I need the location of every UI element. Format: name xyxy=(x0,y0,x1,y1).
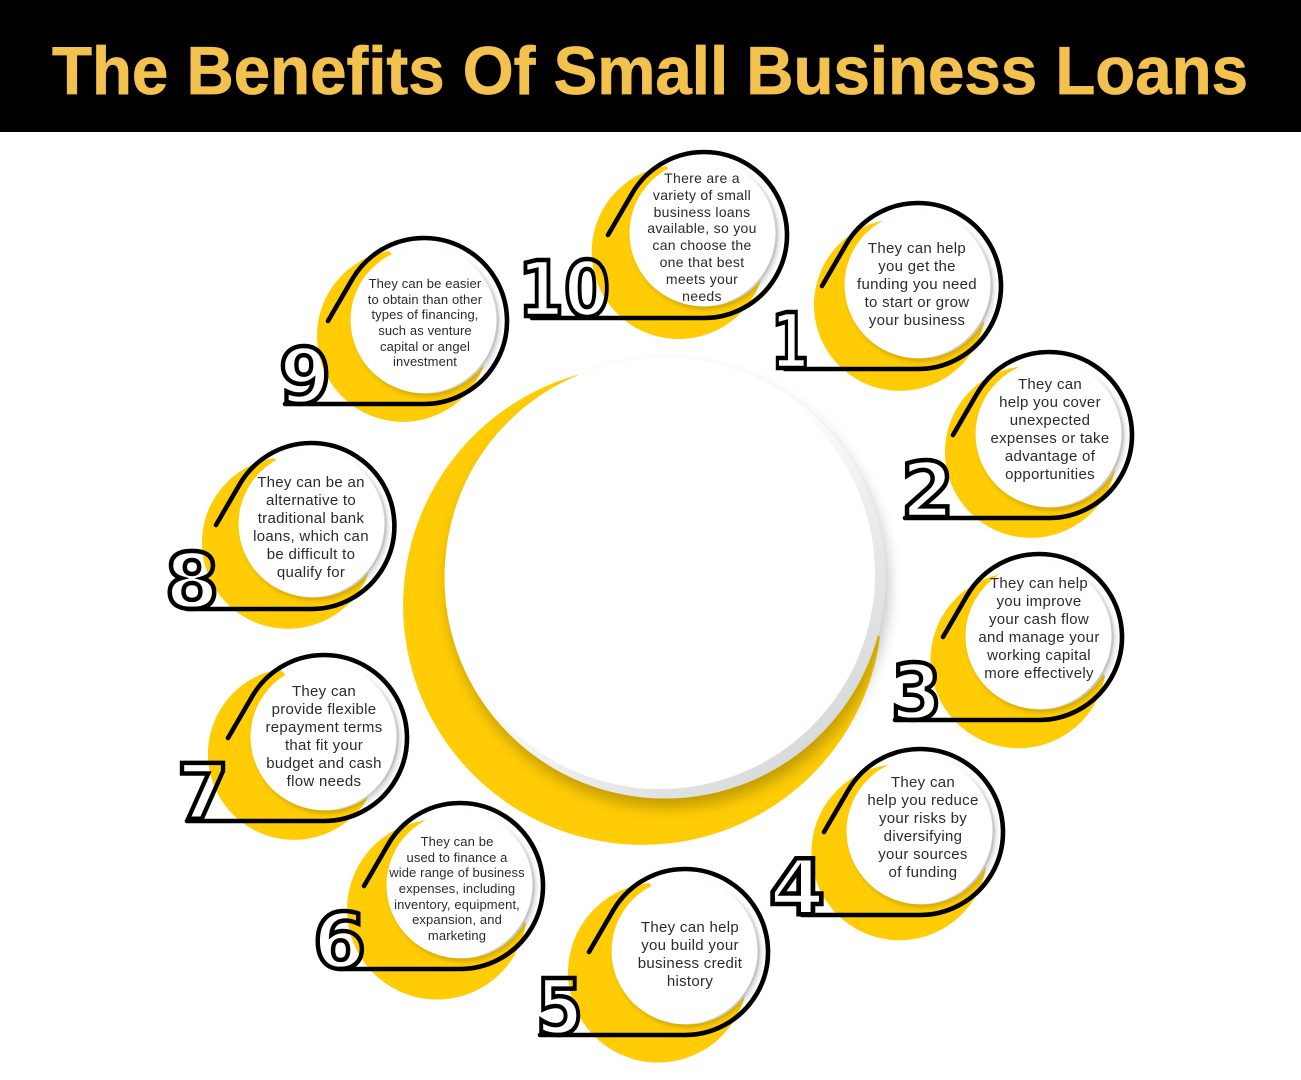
step 6: expansion, and xyxy=(412,912,502,927)
step 10: There are a xyxy=(664,170,740,186)
step 7: 7 xyxy=(177,749,229,838)
step 9: They can be easier xyxy=(369,276,482,291)
step 2: advantage of xyxy=(1005,448,1096,465)
step 6: expenses, including xyxy=(399,881,515,896)
step 10: needs xyxy=(682,288,722,304)
step 6: wide range of business xyxy=(388,865,525,880)
step 7 xyxy=(177,655,407,840)
step 5: you build your xyxy=(641,937,739,954)
step 5: They can help xyxy=(641,919,739,936)
step 7: that fit your xyxy=(285,737,363,754)
step 3: and manage your xyxy=(978,629,1100,646)
step 4: your risks by xyxy=(879,810,967,827)
step 8: loans, which can xyxy=(253,528,369,545)
step 3: working capital xyxy=(986,647,1091,664)
step 10: one that best xyxy=(660,254,744,270)
step 9: such as venture xyxy=(378,323,472,338)
step 8: They can be an xyxy=(257,474,365,491)
step 4 xyxy=(769,749,1003,940)
step 9: types of financing, xyxy=(371,307,479,322)
step 2: opportunities xyxy=(1005,466,1095,483)
step 5: 5 xyxy=(536,964,583,1053)
step 10: meets your xyxy=(666,271,738,287)
step 7: They can xyxy=(292,683,356,700)
title banner xyxy=(0,0,1301,132)
step 8: 8 xyxy=(165,538,219,627)
step 7: repayment terms xyxy=(265,719,383,736)
step 6: 6 xyxy=(313,898,366,987)
step 3: you improve xyxy=(996,593,1082,610)
step 8: qualify for xyxy=(277,564,345,581)
step 8: be difficult to xyxy=(267,546,355,563)
step 1: you get the xyxy=(878,258,956,275)
step 4: 4 xyxy=(769,844,825,933)
step 6 xyxy=(313,803,543,1000)
step 1: your business xyxy=(869,312,965,329)
step 1: They can help xyxy=(868,240,966,257)
step 10: can choose the xyxy=(652,237,752,253)
step 8: traditional bank xyxy=(258,510,364,527)
step 8: alternative to xyxy=(266,492,356,509)
step 10 xyxy=(518,152,787,339)
step 4: of funding xyxy=(889,864,957,881)
step 10: business loans xyxy=(654,204,750,220)
step 10: available, so you xyxy=(647,220,757,236)
step 9: to obtain than other xyxy=(368,292,483,307)
step 4: help you reduce xyxy=(867,792,979,809)
step 1: funding you need xyxy=(857,276,977,293)
step 1 xyxy=(771,203,1001,391)
step 5 xyxy=(536,869,768,1063)
step 2: unexpected xyxy=(1010,412,1090,429)
step 3: 3 xyxy=(891,649,942,738)
step 7: provide flexible xyxy=(272,701,376,718)
step 8 xyxy=(165,443,394,629)
step 9: 9 xyxy=(279,333,331,422)
title: The Benefits Of Small Business Loans xyxy=(52,33,1248,109)
step 3: your cash flow xyxy=(989,611,1089,628)
step 6: inventory, equipment, xyxy=(394,897,520,912)
step 2 xyxy=(901,352,1132,538)
step 2: help you cover xyxy=(999,394,1101,411)
step 4: your sources xyxy=(878,846,968,863)
central circle with yellow crescent xyxy=(403,358,886,845)
step 9: capital or angel xyxy=(380,339,470,354)
step 7: flow needs xyxy=(287,773,361,790)
step 1: 1 xyxy=(771,298,809,387)
step 6: used to finance a xyxy=(406,850,508,865)
step 9 xyxy=(279,238,507,422)
step 5: history xyxy=(667,973,713,990)
step 2: expenses or take xyxy=(990,430,1110,447)
step 2: They can xyxy=(1018,376,1082,393)
step 6: marketing xyxy=(428,928,486,943)
step 4: diversifying xyxy=(884,828,962,845)
step 3: They can help xyxy=(990,575,1088,592)
step 10: variety of small xyxy=(653,187,751,203)
step 4: They can xyxy=(891,774,955,791)
step 3: more effectively xyxy=(984,665,1094,682)
step 1: to start or grow xyxy=(865,294,969,311)
step 10: 10 xyxy=(518,246,610,335)
step 7: budget and cash xyxy=(266,755,382,772)
step 3 xyxy=(891,554,1122,748)
step 2: 2 xyxy=(901,447,954,536)
step 9: investment xyxy=(393,354,457,369)
step 6: They can be xyxy=(421,834,493,849)
step 5: business credit xyxy=(638,955,743,972)
